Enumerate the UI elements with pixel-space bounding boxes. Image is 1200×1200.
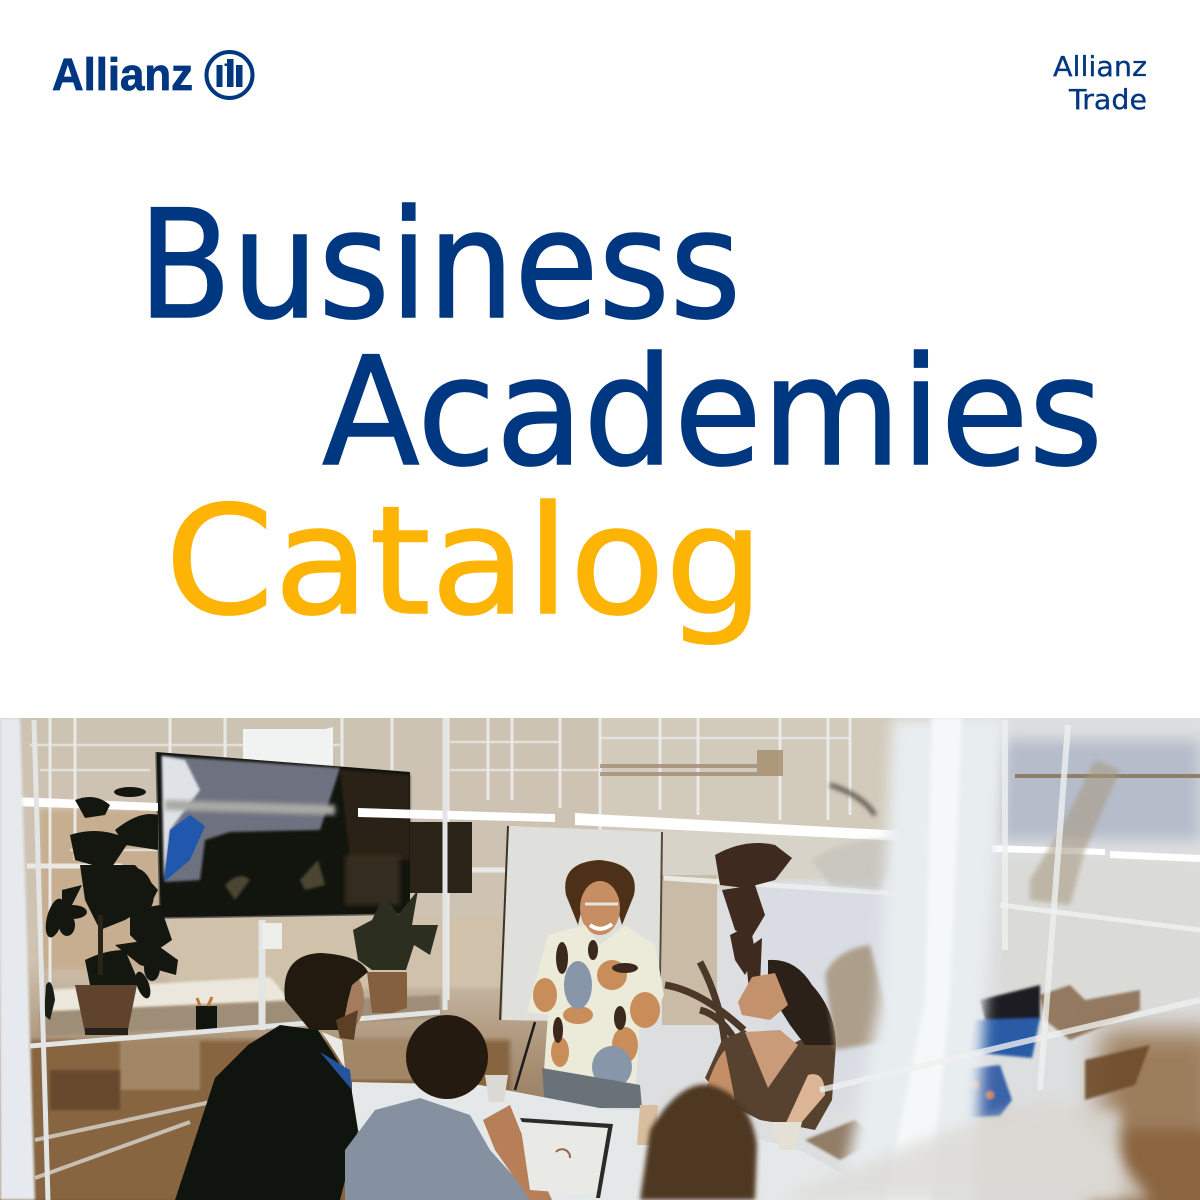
man head — [337, 979, 364, 1031]
logo: Allianz — [52, 49, 252, 100]
presenter shirt — [527, 925, 664, 1085]
title line: Business: Business — [138, 179, 741, 353]
logo emblem — [206, 52, 252, 98]
left blurred pillar — [0, 718, 35, 1200]
plant pot — [75, 985, 137, 1033]
laptop — [520, 1118, 613, 1198]
presenter — [527, 860, 664, 1108]
man suit — [175, 1025, 358, 1200]
pen holder on shelf — [196, 997, 217, 1031]
brand label: Allianz Trade — [1053, 51, 1147, 116]
photo background — [0, 718, 1200, 1200]
ceiling panel highlight — [243, 727, 333, 766]
title line: Catalog: Catalog — [165, 475, 764, 649]
window frame diagonals right — [820, 720, 1200, 1090]
plant on center shelf — [353, 890, 438, 1013]
blurred plant silhouette reflections — [812, 785, 900, 1050]
man in dark suit — [175, 953, 368, 1200]
grey shirt person hair — [406, 1015, 488, 1099]
person in foreground with long hair — [640, 1085, 757, 1200]
brand label: Allianz Trade: Allianz — [1053, 51, 1147, 83]
right plant — [664, 843, 792, 1042]
brand label: Allianz Trade: Trade — [1068, 84, 1147, 116]
plant foliage — [42, 787, 178, 1000]
reflected fern top right — [1030, 760, 1120, 905]
person with grey shirt — [345, 1015, 552, 1200]
window grid frames — [27, 718, 1200, 1000]
hanging leaves — [715, 843, 792, 984]
man collar — [322, 1032, 345, 1068]
grey shirt — [345, 1098, 535, 1200]
blue chair and decor in right room — [955, 985, 1150, 1118]
dark panel behind screen — [410, 822, 472, 893]
ceiling lights — [14, 797, 1200, 862]
title — [138, 179, 1103, 649]
seated woman hair — [768, 960, 836, 1045]
seated woman — [705, 960, 836, 1130]
table — [352, 1075, 890, 1200]
logo wordmark: Allianz — [52, 49, 193, 100]
seated woman body — [705, 1030, 836, 1130]
raised arm — [483, 1105, 552, 1200]
lower palm plant — [664, 960, 746, 1042]
wall screen — [156, 752, 410, 918]
presenter hair — [565, 860, 635, 925]
white blurred pillar — [840, 718, 1005, 1200]
pipes on back wall — [600, 750, 1200, 776]
presenter jeans — [542, 1068, 642, 1108]
plant on left shelf — [42, 787, 178, 1035]
presenter face — [580, 881, 620, 935]
wall outlet — [262, 923, 282, 949]
photo: meeting room seen through glass — [0, 718, 1200, 1200]
shelf glass and frame — [30, 718, 445, 1200]
whiteboard on easel — [500, 826, 662, 1090]
title line: Academies: Academies — [322, 326, 1103, 500]
seated woman face — [738, 973, 788, 1020]
blurred foreground bottom right — [780, 1100, 1150, 1200]
